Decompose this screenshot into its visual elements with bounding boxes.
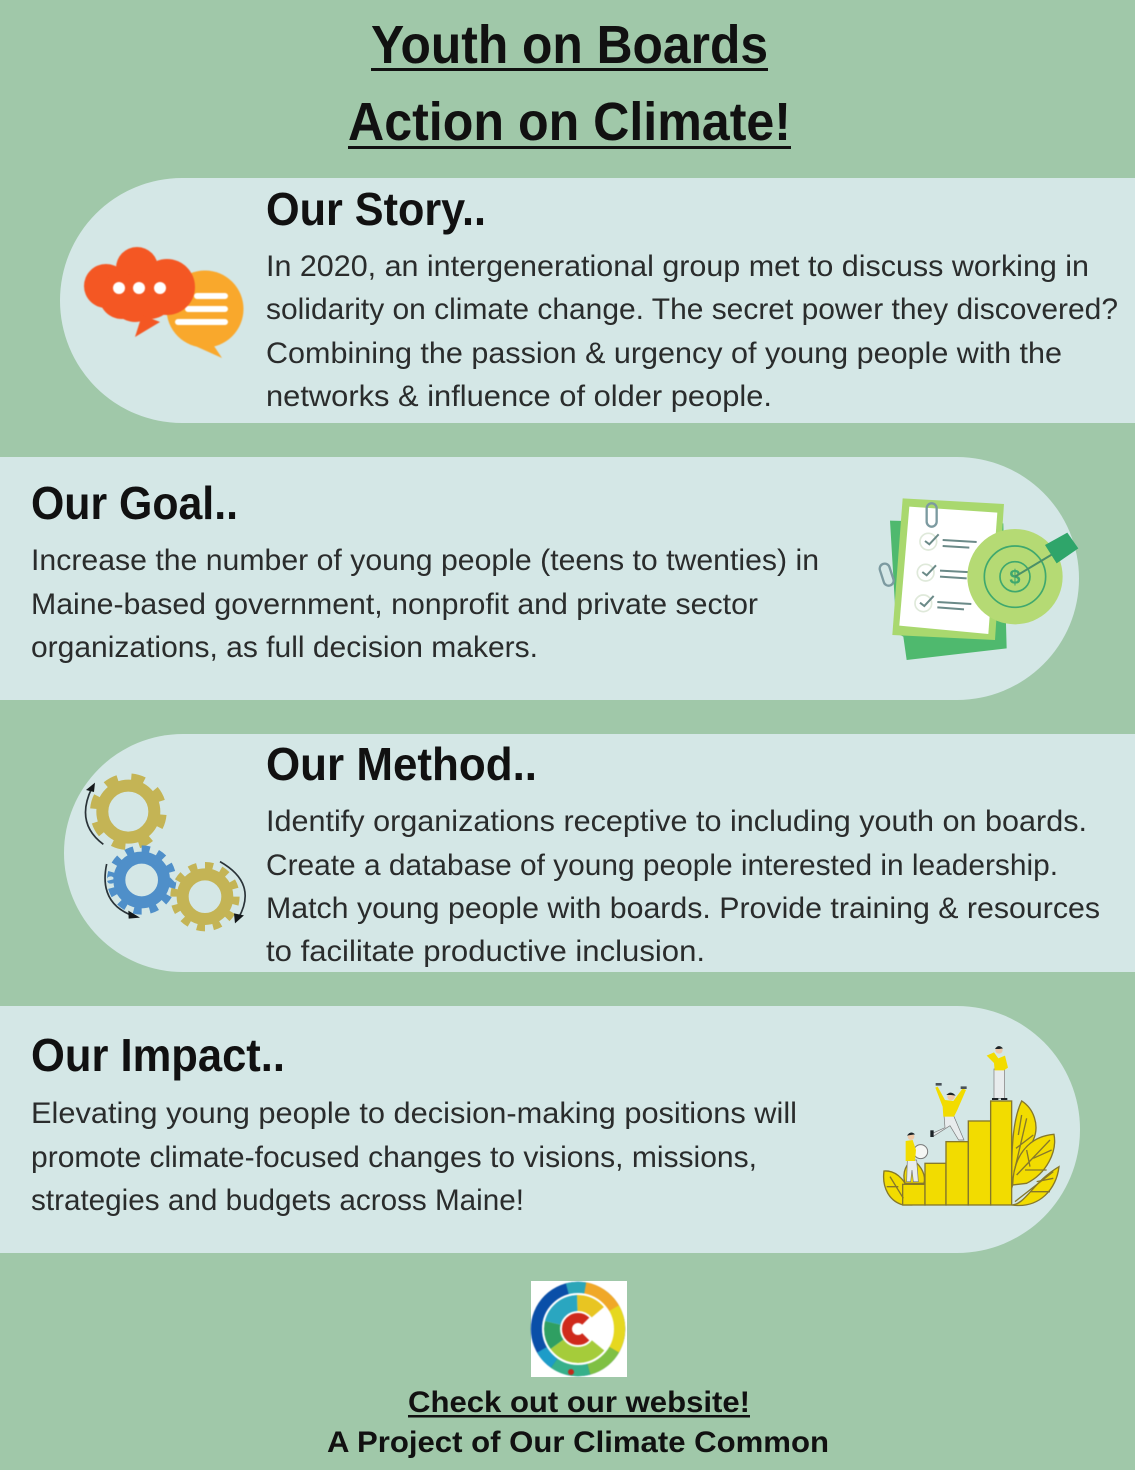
text: our story body: In 2020, an intergenerational group met to discuss working in (266, 250, 1089, 283)
figure: person carrying sack (906, 1132, 928, 1182)
text: our method body: Match young people with boards. Provide training & resources (266, 892, 1100, 925)
text: our impact body: promote climate-focused changes to visions, missions, (31, 1141, 757, 1174)
icon: checklist and target (878, 498, 1078, 660)
title (348, 15, 791, 152)
footer: website link: Check out our website! (408, 1386, 750, 1419)
text: our impact body: strategies and budgets across Maine! (31, 1184, 524, 1217)
panel: our story (60, 178, 1135, 423)
text: our method body: Identify organizations receptive to including youth on boards. (266, 805, 1087, 838)
text: our goal body: organizations, as full decision makers. (31, 631, 538, 664)
panel: our method (64, 734, 1135, 972)
heading: our story: Our Story.. (266, 183, 486, 235)
title: Youth on Boards (371, 15, 768, 75)
text: our method body (266, 805, 1100, 968)
footer: project credit: A Project of Our Climate Common (327, 1426, 829, 1459)
text: our impact body: Elevating young people to decision-making positions will (31, 1097, 797, 1130)
text: our method body: to facilitate productive inclusion. (266, 935, 705, 968)
text: our story body: Combining the passion & urgency of young people with the (266, 337, 1062, 370)
text: our goal body: Increase the number of young people (teens to twenties) in (31, 544, 819, 577)
panel: our impact (0, 1006, 1080, 1253)
heading: our method: Our Method.. (266, 738, 537, 790)
text: our method body: Create a database of young people interested in leadership. (266, 849, 1058, 882)
icon: speech bubbles (84, 247, 244, 358)
text: our impact body (31, 1097, 797, 1217)
heading: our impact: Our Impact.. (31, 1029, 285, 1081)
icon: people climbing bars (884, 1046, 1059, 1205)
icon: gears (85, 778, 245, 928)
text: our story body (266, 250, 1118, 413)
text: our goal body (31, 544, 819, 664)
icon: checklist and target: $ (1009, 567, 1021, 589)
figure: person on top bar (987, 1046, 1008, 1099)
text: our goal body: Maine-based government, nonprofit and private sector (31, 588, 758, 621)
heading: our goal: Our Goal.. (31, 477, 238, 529)
text: our story body: networks & influence of older people. (266, 380, 772, 413)
text: our story body: solidarity on climate change. The secret power they discovered? (266, 293, 1118, 326)
title: Action on Climate! (348, 92, 791, 152)
panel: our goal (0, 457, 1079, 700)
logo: our climate common (531, 1281, 627, 1377)
figure: jumping person (932, 1084, 967, 1140)
